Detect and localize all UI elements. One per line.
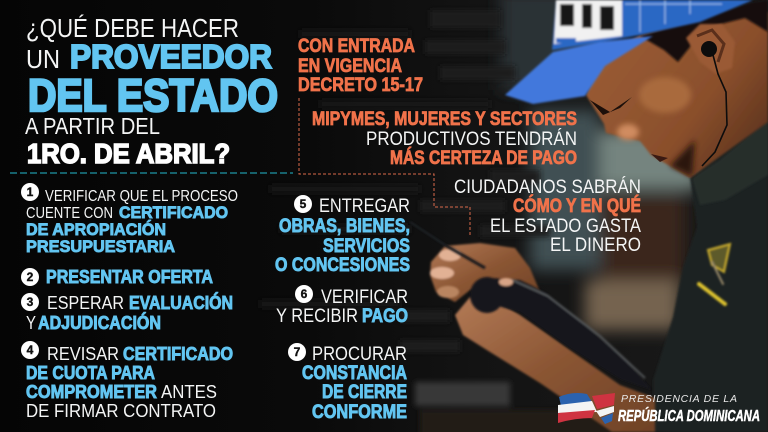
- ear: [686, 24, 735, 74]
- step 7: DE CIERRE: [322, 382, 407, 403]
- left dashed divider: [10, 172, 293, 174]
- logo: Presidencia de la República Dominicana: [558, 393, 760, 425]
- step 3: ESPERAR: [47, 293, 124, 313]
- step 4: ANTES: [161, 382, 217, 402]
- forearm and hands: [430, 243, 655, 432]
- step 7: [288, 343, 407, 423]
- icon: Dominican flag: [558, 393, 615, 424]
- orange dashed connector: [299, 98, 470, 235]
- step 5: SERVICIOS: [323, 236, 410, 257]
- step 4: REVISAR: [47, 344, 119, 364]
- number badge 1: 1: [27, 185, 34, 199]
- callout: decree in force: [298, 36, 423, 96]
- number badge 2: 2: [27, 270, 34, 284]
- step 7: PROCURAR: [312, 344, 407, 365]
- callout: citizens: CÓMO Y EN QUÉ: [513, 195, 641, 217]
- number badge 3: 3: [27, 295, 34, 309]
- number badge 2: [21, 268, 39, 286]
- step 7: CONFORME: [312, 402, 407, 423]
- step 3: Y: [26, 313, 36, 333]
- callout: decree in force: CON ENTRADA: [298, 36, 415, 57]
- step 4: DE FIRMAR CONTRATO: [26, 401, 216, 421]
- step 4: [21, 341, 233, 421]
- callout: citizens: EL ESTADO GASTA: [490, 216, 641, 237]
- logo: Presidencia de la República Dominicana: PRESIDENCIA DE LA: [621, 393, 737, 405]
- step 3: [21, 292, 233, 333]
- callout: citizens: CIUDADANOS SABRÁN: [454, 177, 641, 198]
- step 6: PAGO: [362, 306, 408, 327]
- callout: MIPYMES payment certainty: [312, 109, 577, 169]
- step 3: EVALUACIÓN: [129, 292, 233, 313]
- step 4: COMPROMETER: [26, 382, 157, 402]
- number badge 4: 4: [27, 343, 34, 357]
- title: UN: [26, 44, 60, 74]
- worker face: [586, 12, 768, 178]
- step 1: VERIFICAR QUE EL PROCESO: [45, 188, 238, 205]
- stacked parts in the background: [260, 10, 650, 432]
- callout: MIPYMES payment certainty: MIPYMES, MUJERES Y SECTORES: [312, 109, 577, 130]
- blue cap: [505, 0, 753, 104]
- number badge 5: 5: [300, 197, 307, 211]
- step 6: [276, 285, 408, 327]
- hair: [640, 0, 768, 62]
- title: PROVEEDOR: [70, 38, 272, 75]
- callout: MIPYMES payment certainty: PRODUCTIVOS TENDRÁN: [366, 129, 577, 150]
- title: 1RO. DE ABRIL?: [27, 138, 230, 169]
- step 2: PRESENTAR OFERTA: [46, 267, 213, 287]
- step 4: CERTIFICADO: [123, 344, 233, 364]
- step 5: OBRAS, BIENES,: [279, 216, 410, 237]
- step 1: CERTIFICADO: [119, 203, 228, 222]
- title: ¿QUÉ DEBE HACER: [26, 13, 239, 43]
- earphone and cable: [701, 41, 727, 166]
- number badge 7: 7: [294, 345, 301, 359]
- title: [25, 13, 278, 169]
- step 4: DE CUOTA PARA: [26, 363, 155, 383]
- step 5: [275, 195, 410, 276]
- step 6: VERIFICAR: [321, 287, 408, 308]
- number badge 4: [21, 341, 39, 359]
- callout: decree in force: DECRETO 15-17: [298, 75, 423, 96]
- callout: MIPYMES payment certainty: MÁS CERTEZA DE PAGO: [390, 147, 577, 169]
- worker shirt: [653, 120, 768, 432]
- step 6: Y RECIBIR: [276, 306, 358, 327]
- step 1: DE APROPIACIÓN: [26, 220, 166, 239]
- title: A PARTIR DEL: [25, 113, 160, 139]
- number badge 6: 6: [301, 287, 308, 301]
- step 1: [21, 183, 238, 256]
- step 1: CUENTE CON: [26, 205, 113, 222]
- step 1: PRESUPUESTARIA: [26, 237, 175, 256]
- callout: decree in force: EN VIGENCIA: [298, 56, 402, 77]
- step 5: O CONCESIONES: [275, 255, 410, 276]
- shirt emblem: [699, 244, 730, 304]
- title: DEL ESTADO: [28, 70, 278, 121]
- number badge 1: [21, 183, 39, 201]
- step 5: ENTREGAR: [319, 196, 410, 217]
- step 7: CONSTANCIA: [302, 363, 407, 384]
- callout: citizens: [454, 177, 641, 256]
- callout: citizens: EL DINERO: [550, 235, 641, 256]
- number badge 3: [21, 293, 39, 311]
- step 3: ADJUDICACIÓN: [38, 312, 161, 333]
- wall behind worker: [500, 0, 700, 330]
- belt part held by worker: [410, 222, 652, 390]
